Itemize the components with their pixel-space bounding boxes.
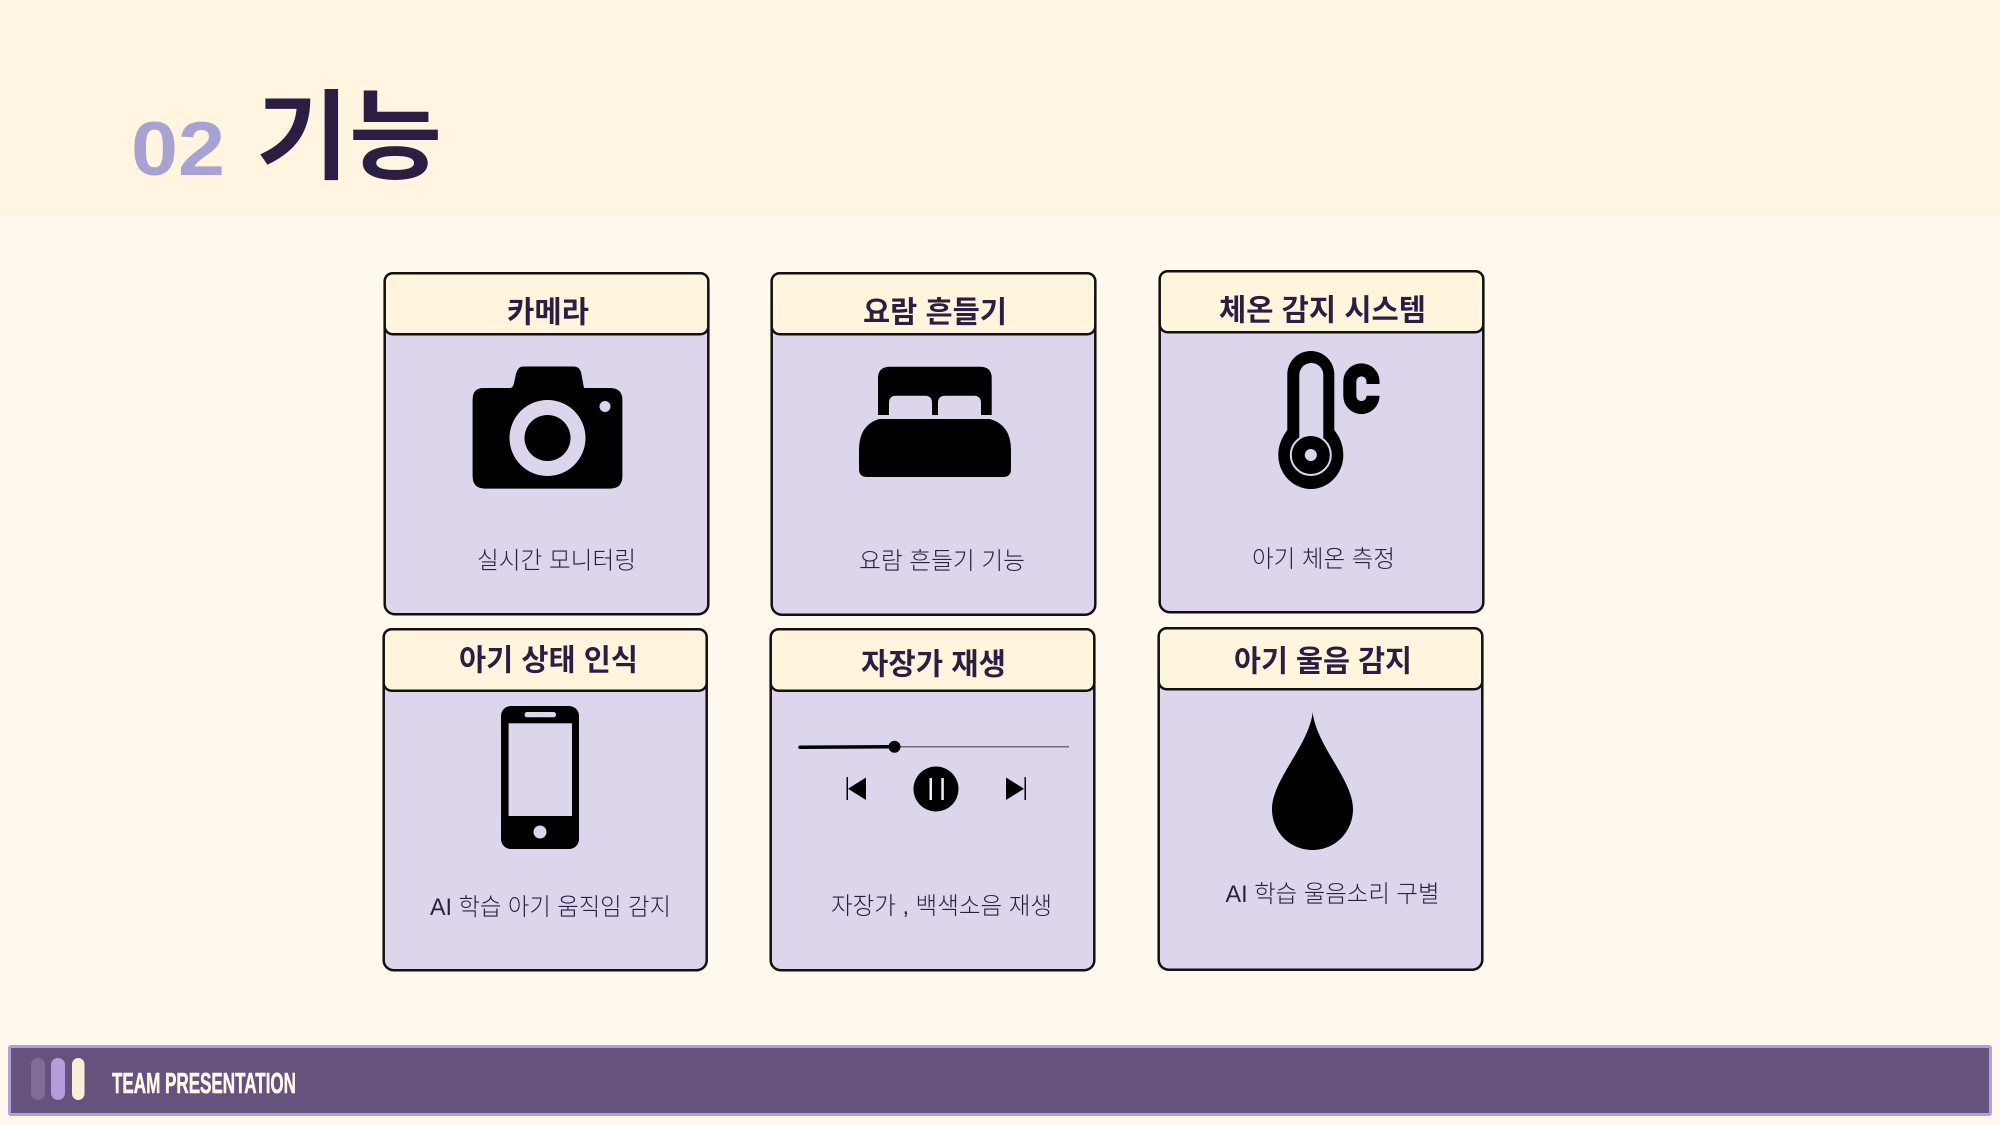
icon: bed [859,367,1011,477]
icon: music player [800,741,1069,812]
icon: water drop [1272,712,1353,850]
section number: 02 [131,107,225,192]
description: cradle: 요람 흔들기 기능 [859,548,1025,575]
footer pills [31,1058,84,1100]
heading: lullaby: 자장가 재생 [861,648,1006,682]
icon: thermometer [1278,351,1373,489]
heading: camera: 카메라 [507,296,589,330]
panel: cry detection [1159,628,1482,970]
panel: temperature [1160,271,1483,612]
description: lullaby: 자장가 , 백색소음 재생 [831,893,1052,920]
title: 기능 [256,82,442,192]
description: camera: 실시간 모니터링 [477,548,636,574]
heading: baby state recognition: 아기 상태 인식 [459,644,638,678]
panel: cradle [772,273,1095,615]
panel: camera [385,273,708,614]
footer label: TEAM PRESENTATION [112,1068,296,1100]
icon: smartphone [501,706,579,849]
description: cry detection: AI 학습 울음소리 구별 [1226,881,1440,908]
panel: baby state recognition [384,629,707,970]
heading: cry detection: 아기 울음 감지 [1234,646,1412,678]
heading: cradle: 요람 흔들기 [863,296,1007,330]
footer bar [10,1046,1990,1114]
heading: temperature: 체온 감지 시스템 [1219,294,1426,328]
panel: lullaby [771,629,1094,970]
description: temperature: 아기 체온 측정 [1252,546,1395,573]
header band [0,0,2000,216]
icon: camera [473,366,622,489]
description: baby state recognition: AI 학습 아기 움직임 감지 [430,894,671,921]
